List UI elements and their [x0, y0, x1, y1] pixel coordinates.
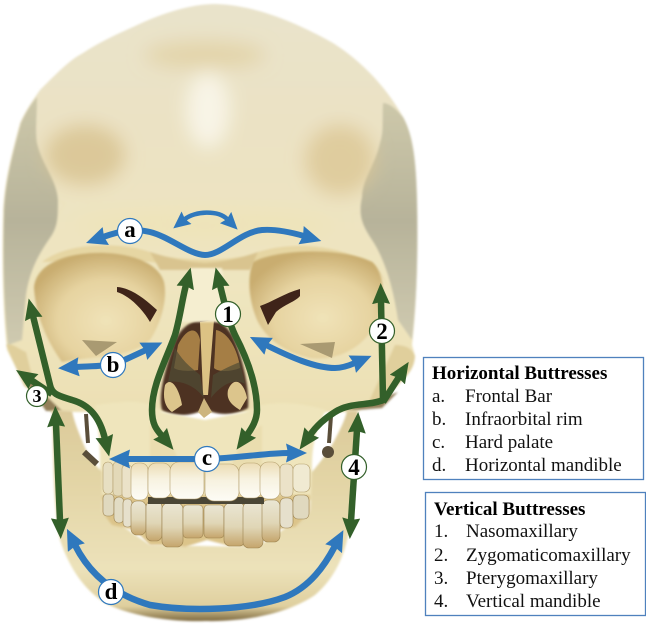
label d	[98, 579, 124, 604]
list: vertical items: Nasomaxillary	[466, 521, 578, 542]
list: horizontal items: Horizontal mandible	[465, 455, 622, 476]
label d: d	[105, 579, 118, 604]
list: vertical items	[434, 521, 631, 612]
arrow: right nasomaxillary	[220, 285, 257, 435]
temporal right	[360, 103, 417, 340]
arrow: hard palate	[127, 453, 289, 459]
lower teeth	[102, 494, 310, 548]
marker labels	[26, 217, 394, 604]
green arrows: vertical buttresses	[31, 285, 399, 521]
list: vertical items: Pterygomaxillary	[466, 568, 598, 589]
heading: horizontal buttresses: Horizontal Buttresses	[432, 363, 607, 384]
list: horizontal items: a.	[432, 386, 445, 407]
panel: vertical buttresses legend	[426, 492, 646, 616]
brow ridge	[42, 245, 392, 292]
label b	[100, 352, 126, 378]
list: vertical items: 1.	[434, 521, 448, 542]
mandible	[52, 410, 358, 621]
forehead tones	[45, 41, 375, 239]
label b: b	[107, 352, 119, 377]
arrow: frontal arch	[185, 213, 227, 219]
arrow: zygomaticomaxillary vertical	[381, 301, 383, 400]
list: horizontal items: Hard palate	[465, 432, 553, 453]
label 2: 2	[376, 319, 388, 344]
temporal left	[3, 97, 58, 345]
label 3	[26, 386, 48, 406]
label a	[118, 217, 142, 244]
list: horizontal items: c.	[432, 432, 445, 453]
list: vertical items: Zygomaticomaxillary	[466, 545, 631, 566]
label 1: 1	[222, 302, 234, 327]
heading: vertical buttresses: Vertical Buttresses	[434, 499, 585, 520]
arrow: pterygomaxillary branch	[31, 380, 52, 394]
arrow: pterygomaxillary	[33, 316, 105, 439]
arrow: horizontal mandible	[75, 545, 335, 609]
arrow: left nasomaxillary	[152, 285, 186, 436]
arrow: left vertical mandible	[56, 424, 60, 521]
arrow: right infraorbital rim	[266, 345, 355, 368]
list: vertical items: 2.	[434, 545, 448, 566]
arrow: frontal bar	[103, 230, 304, 255]
list: horizontal items	[432, 386, 622, 476]
nasal aperture	[161, 319, 248, 418]
label c	[194, 445, 220, 472]
list: horizontal items: Infraorbital rim	[465, 409, 583, 430]
right pterygoid screw	[329, 416, 331, 443]
list: horizontal items: b.	[432, 409, 446, 430]
list: horizontal items: d.	[432, 455, 446, 476]
label 4: 4	[348, 455, 360, 480]
label 1	[216, 302, 240, 327]
arrow: right vertical mandible	[351, 430, 357, 521]
label 3: 3	[32, 386, 42, 406]
left orbit	[34, 253, 165, 362]
arrow: zygomaticomaxillary medial	[310, 400, 383, 435]
label a: a	[124, 217, 136, 242]
list: vertical items: 4.	[434, 591, 448, 612]
label 4	[342, 454, 366, 480]
maxilla	[95, 402, 326, 500]
list: vertical items: Vertical mandible	[466, 591, 601, 612]
right orbit	[249, 252, 383, 358]
upper teeth	[103, 462, 310, 501]
label 2	[370, 318, 394, 344]
blue arrows: horizontal buttresses	[75, 213, 355, 609]
skull illustration	[2, 4, 417, 621]
panel: horizontal buttresses legend	[424, 358, 644, 480]
label c: c	[202, 445, 212, 470]
left pterygoid screw	[86, 414, 88, 443]
list: vertical items: 3.	[434, 568, 448, 589]
arrow: zygomaticomaxillary lateral	[383, 377, 399, 402]
list: horizontal items: Frontal Bar	[465, 386, 553, 407]
arrow: left infraorbital rim	[76, 350, 146, 367]
